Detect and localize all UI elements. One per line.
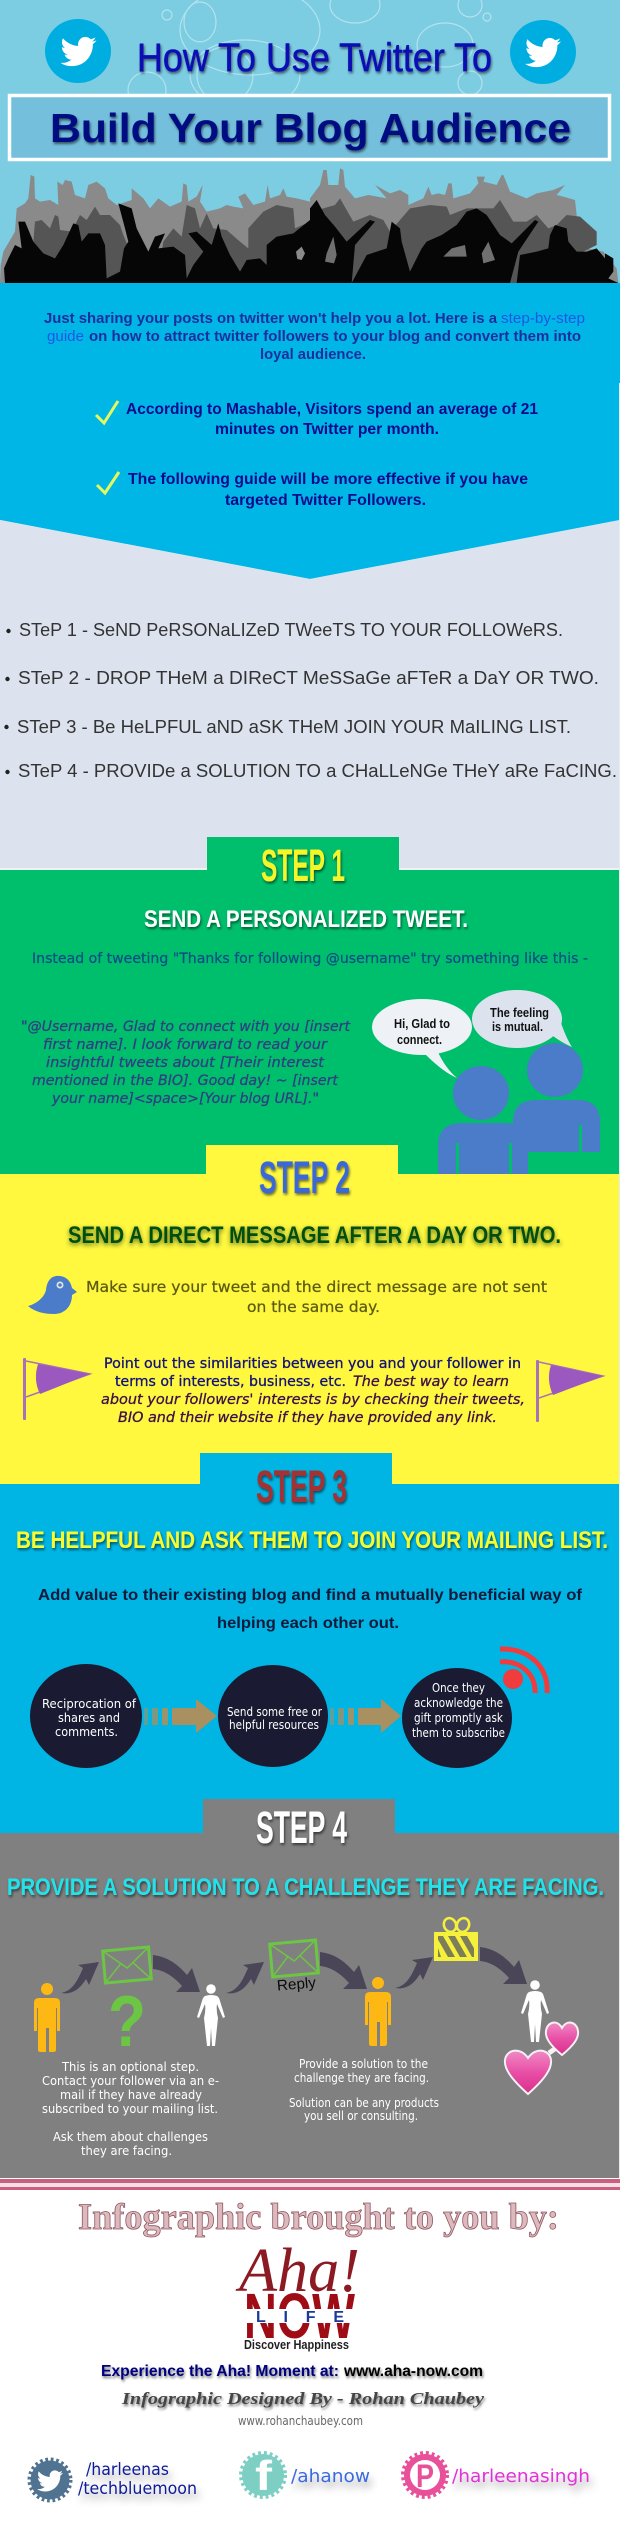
circle: ask to subscribe — [402, 1668, 512, 1768]
social: facebook: f — [255, 2452, 273, 2499]
step 1 quote — [21, 1019, 351, 1107]
fact 2: targeted Twitter Followers. — [225, 492, 426, 509]
social: facebook — [241, 2452, 370, 2499]
step 1 quote: mentioned in the BIO]. Good day! ~ [insert — [32, 1073, 339, 1089]
panel: step 2 — [0, 1145, 620, 1484]
icon: check mark 1 — [96, 401, 118, 423]
step 4 text left: subscribed to your mailing list. — [42, 2101, 218, 2116]
panel: step list — [0, 520, 620, 870]
footer heading: Infographic brought to you by: — [78, 2197, 559, 2238]
step 4 text right: challenge they are facing. — [294, 2071, 429, 2085]
icon: question mark: ? — [108, 1982, 146, 2062]
title line 2: Build Your Blog Audience — [50, 105, 571, 151]
icon: man 2 — [365, 1977, 391, 2046]
step 4 text left: they are facing. — [81, 2143, 172, 2158]
fact 2 — [128, 471, 528, 509]
speech bubble: Hi, Glad to connect — [372, 999, 472, 1078]
step 1 quote: "@Username, Glad to connect with you [insert — [21, 1019, 351, 1035]
arrow 1 — [144, 1699, 217, 1733]
icon: check mark 2 — [97, 472, 119, 493]
icon: hearts — [505, 2023, 578, 2094]
social: twitter: /techbluemoon — [78, 2479, 197, 2499]
social: facebook: /ahanow — [291, 2466, 370, 2487]
intro paragraph: guide — [47, 328, 84, 345]
logo: NOW — [244, 2280, 355, 2352]
step 3 paragraph — [38, 1587, 583, 1632]
icon: twitter circle left — [45, 19, 111, 83]
step 2 paragraph: The best way to learn — [353, 1374, 509, 1390]
step 2 tip: Make sure your tweet and the direct message are not sent — [86, 1278, 547, 1296]
icon: envelope 2 — [270, 1940, 318, 1977]
arrow up 2 — [226, 1962, 264, 1993]
step 2 paragraph: BIO and their website if they have provided any link. — [118, 1410, 497, 1426]
step 2 paragraph — [101, 1356, 525, 1426]
intro paragraph — [44, 310, 585, 363]
step 1 quote: first name]. I look forward to read your — [43, 1037, 328, 1053]
social: pinterest: P — [416, 2458, 434, 2494]
arrow down 1 — [153, 1955, 200, 1992]
fact 1: According to Mashable, Visitors spend an average of 21 — [126, 401, 538, 418]
social: pinterest — [403, 2453, 590, 2497]
step 1 intro: Instead of tweeting "Thanks for following @username" try something like this - — [32, 951, 588, 967]
reply label: Reply — [276, 1974, 317, 1995]
logo: LIFE — [256, 2309, 344, 2326]
step 4 text left: Ask them about challenges — [53, 2129, 208, 2144]
step 4 text right: you sell or consulting. — [304, 2109, 418, 2123]
logo — [235, 2237, 360, 2352]
intro paragraph: on how to attract twitter followers to your blog and convert them into — [89, 328, 581, 345]
social: twitter: /harleenas — [86, 2460, 169, 2480]
header panel — [0, 0, 620, 284]
step 1 quote: insightful tweets about [Their interest — [46, 1055, 325, 1071]
panel: step 1 — [0, 837, 620, 1174]
step 4 text right — [289, 2057, 439, 2123]
step 2 paragraph: about your followers' interests is by checking their tweets, — [101, 1392, 525, 1408]
step 2 label: STEP 2 — [259, 1152, 350, 1203]
icon: woman 1 — [197, 1984, 225, 2046]
step 2 tip: on the same day. — [247, 1298, 380, 1316]
circle: free resources: Send some free or — [227, 1704, 323, 1719]
circle: reciprocation — [30, 1664, 142, 1768]
circle: ask to subscribe: them to subscribe — [412, 1725, 505, 1740]
step list items: STeP 2 - DROP THeM a DIReCT MeSSaGe aFTeR a DaY OR TWO. — [18, 668, 599, 688]
step list items — [4, 620, 617, 781]
intro paragraph: Just sharing your posts on twitter won't help you a lot. Here is a — [44, 310, 498, 327]
circle: reciprocation: shares and — [58, 1710, 120, 1725]
icon: pennant left — [23, 1358, 90, 1420]
step 3 paragraph: helping each other out. — [217, 1615, 399, 1632]
arrow down 3 — [480, 1947, 527, 1984]
step 4 text left — [42, 2059, 219, 2158]
fact 1 — [126, 401, 538, 438]
intro paragraph: loyal audience. — [260, 346, 366, 363]
arrow up 1 — [61, 1962, 99, 1993]
logo: Discover Happiness — [244, 2337, 349, 2352]
step 1 quote: your name]<space>[Your blog URL]." — [51, 1091, 319, 1107]
arrow 2 — [330, 1699, 401, 1733]
step 4 text left: mail if they have already — [60, 2087, 203, 2102]
crowd silhouette — [0, 168, 618, 283]
circle: reciprocation: comments. — [55, 1724, 118, 1739]
step 4 text left: Contact your follower via an e- — [42, 2073, 219, 2088]
speech bubble: Hi, Glad to connect: connect. — [397, 1032, 442, 1047]
step 4 text right: Solution can be any products — [289, 2096, 439, 2110]
panel: footer — [0, 2178, 620, 2525]
circle: reciprocation: Reciprocation of — [42, 1696, 137, 1711]
icon: gift — [434, 1916, 478, 1961]
speech bubble: The feeling is mutual: is mutual. — [492, 1019, 543, 1034]
circle: free resources — [218, 1665, 328, 1767]
panel: step 4 — [0, 1799, 620, 2178]
speech bubble: The feeling is mutual: The feeling — [490, 1005, 549, 1020]
title line 1: How To Use Twitter To — [137, 36, 492, 80]
step list items: STeP 3 - Be HeLPFUL aND aSK THeM JOIN YOUR MaILING LIST. — [17, 717, 571, 737]
circle: ask to subscribe: gift promptly ask — [414, 1710, 504, 1725]
designer credit: Infographic Designed By - Rohan Chaubey — [121, 2389, 485, 2408]
step 1 label: STEP 1 — [261, 840, 345, 891]
step 4 text right: Provide a solution to the — [299, 2057, 428, 2071]
icon: envelope 1 — [103, 1947, 151, 1983]
experience line: Experience the Aha! Moment at: — [101, 2363, 339, 2380]
intro paragraph: step-by-step — [501, 310, 585, 327]
step list items: STeP 1 - SeND PeRSONaLIZeD TWeeTS TO YOUR FOLLOWeRS. — [19, 620, 563, 640]
fact 1: minutes on Twitter per month. — [215, 421, 439, 438]
panel: step 3 — [0, 1453, 620, 1833]
step 4 label: STEP 4 — [256, 1802, 347, 1853]
social: twitter — [30, 2460, 197, 2500]
designer url: www.rohanchaubey.com — [238, 2414, 363, 2428]
circle: ask to subscribe: acknowledge the — [414, 1695, 503, 1710]
experience line — [101, 2363, 483, 2380]
arrow up 3 — [395, 1957, 433, 1988]
icon: pennant right — [536, 1360, 603, 1422]
icon: twitter circle right — [510, 20, 576, 84]
step 2 paragraph: Point out the similarities between you and your follower in — [104, 1356, 521, 1372]
arrow down 2 — [320, 1952, 367, 1989]
people icon — [438, 1043, 600, 1174]
icon: bird — [28, 1276, 77, 1314]
step 3 label: STEP 3 — [256, 1461, 347, 1512]
panel: intro — [0, 283, 620, 579]
icon: man 1 — [34, 1983, 60, 2052]
step 1 heading: SEND A PERSONALIZED TWEET. — [144, 906, 468, 933]
step 2 paragraph: terms of interests, business, etc. — [115, 1374, 346, 1390]
social: pinterest: /harleenasingh — [452, 2466, 590, 2487]
step 3 paragraph: Add value to their existing blog and find a mutually beneficial way of — [38, 1587, 583, 1604]
speech bubble: The feeling is mutual — [472, 990, 572, 1048]
logo: Aha! — [235, 2237, 360, 2305]
circle: ask to subscribe: Once they — [432, 1680, 485, 1695]
circle: free resources: helpful resources — [229, 1717, 319, 1732]
icon: rss — [500, 1649, 547, 1693]
icon: woman 2 — [521, 1980, 549, 2042]
step 4 text left: This is an optional step. — [61, 2059, 199, 2074]
step 2 tip — [86, 1278, 547, 1316]
experience line: www.aha-now.com — [343, 2363, 483, 2380]
step list items: STeP 4 - PROVIDe a SOLUTION TO a CHaLLeNGe THeY aRe FaCING. — [18, 761, 617, 781]
speech bubble: Hi, Glad to connect: Hi, Glad to — [394, 1016, 450, 1031]
fact 2: The following guide will be more effective if you have — [128, 471, 528, 488]
title frame — [10, 96, 610, 160]
